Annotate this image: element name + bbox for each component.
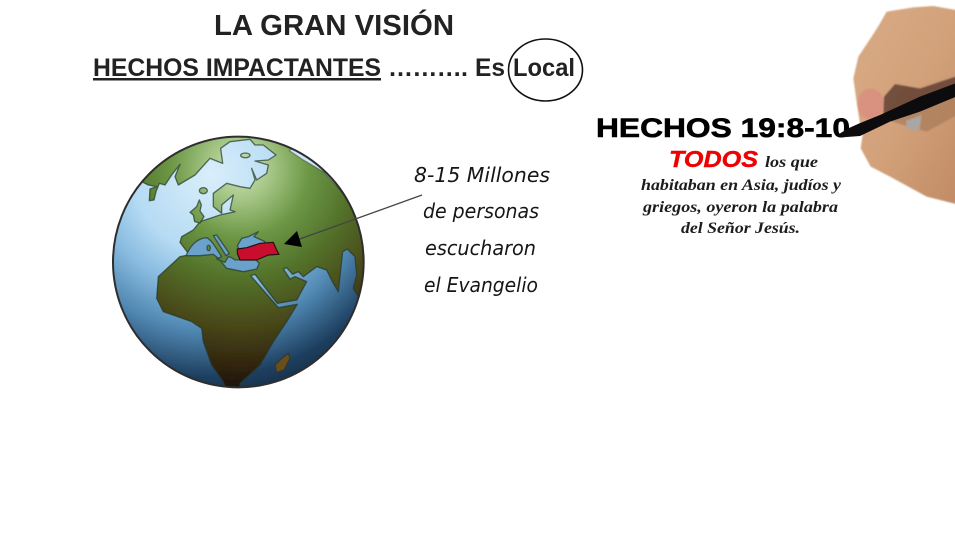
globe outline (113, 137, 364, 387)
turkey highlighted (237, 242, 279, 260)
scripture heading: HECHOS 19:8-10 (596, 113, 850, 143)
verse line 2: habitaban en Asia, judíos y (641, 177, 841, 194)
verse line 3: griegos, oyeron la palabra (642, 199, 838, 216)
ocean: north polar strip (288, 149, 340, 191)
island group (190, 153, 290, 372)
note line 2: de personas (423, 199, 539, 223)
globe (100, 137, 367, 392)
ocean: atlantic and arctic (100, 139, 276, 392)
title: LA GRAN VISIÓN (214, 8, 454, 42)
subtitle: es: Es (475, 54, 505, 82)
note line 1: 8-15 Millones (414, 163, 550, 187)
subtitle line (93, 39, 582, 101)
arrow pointing to turkey (284, 195, 422, 247)
infographic canvas (93, 5, 955, 388)
marker (837, 82, 955, 137)
subtitle: local: Local (513, 54, 575, 82)
verse line 4: del Señor Jesús. (681, 220, 800, 237)
subtitle: hechos impactantes: HECHOS IMPACTANTES (93, 54, 381, 82)
fingertip (857, 89, 884, 119)
hand silhouette (853, 6, 955, 205)
ocean: black sea (237, 232, 265, 252)
gray gap under marker (906, 115, 922, 131)
note line 4: el Evangelio (424, 273, 538, 297)
verse line 1: los que (765, 154, 818, 171)
shadow below marker (880, 93, 955, 132)
note line 3: escucharon (425, 236, 536, 260)
ocean: indian (240, 249, 367, 392)
finger crease shadow (883, 75, 955, 115)
ocean: mediterranean (186, 238, 259, 272)
hand holding marker (837, 6, 955, 205)
circle around local (508, 39, 582, 101)
subtitle: dots: ………. (388, 54, 468, 82)
emphasised word: todos: TODOS (669, 146, 759, 172)
handwritten note (414, 163, 550, 297)
scripture text (641, 146, 841, 237)
ocean: adriatic (213, 235, 229, 256)
